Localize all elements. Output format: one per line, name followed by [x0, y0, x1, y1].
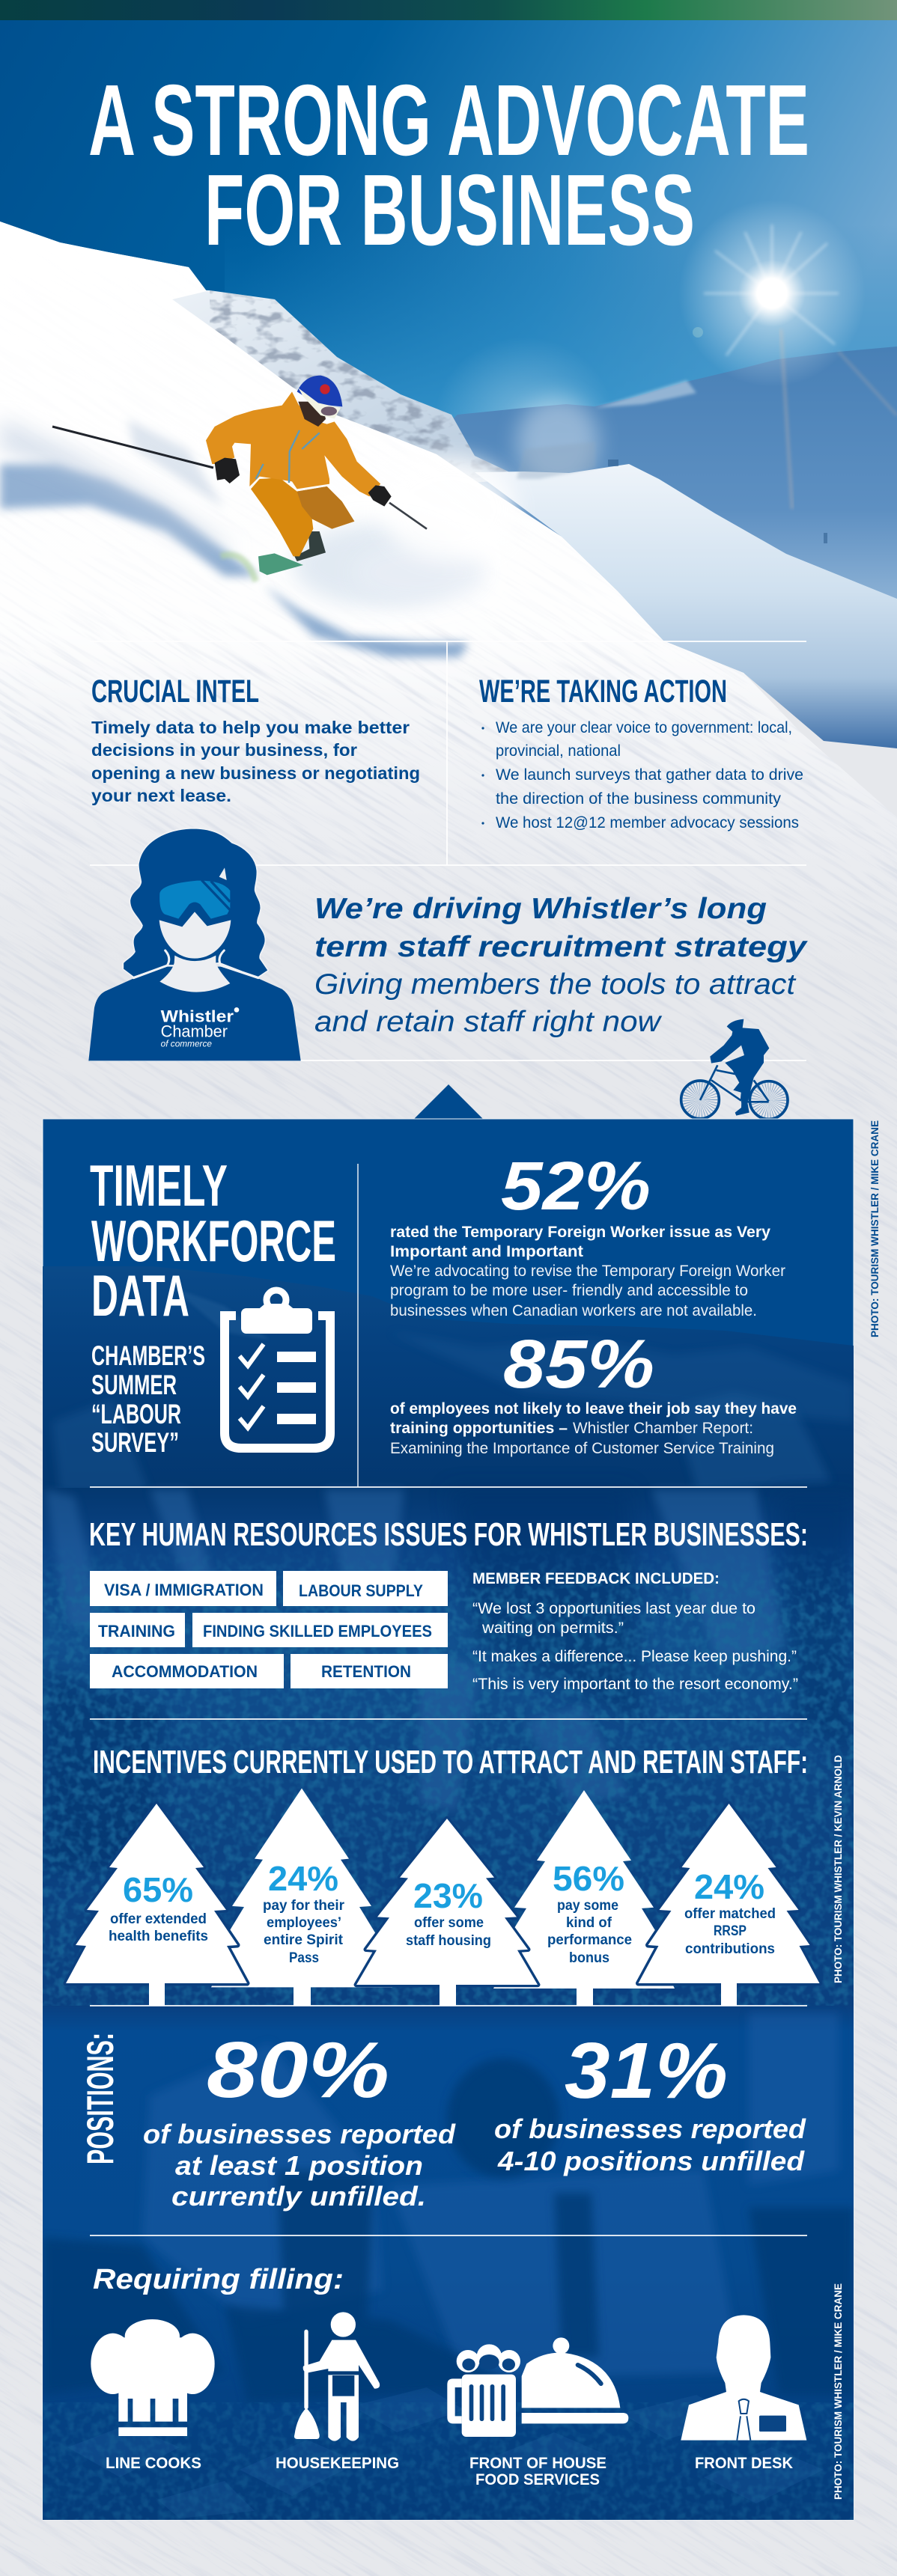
tag: accommodation: ACCOMMODATION [112, 1662, 258, 1681]
trousers [251, 477, 354, 556]
neck [159, 956, 230, 992]
section heading: timely workforce data: DATA [91, 1263, 189, 1328]
member feedback quotes: “We lost 3 opportunities last year due to [472, 1600, 755, 1617]
tree 4 shape [493, 1790, 675, 2006]
member feedback quotes: “It makes a difference... Please keep pushing.” [472, 1648, 797, 1665]
body copy: decisions in your business, for [91, 740, 357, 760]
stat: 85 percent: 85% [503, 1326, 654, 1403]
stat: 85 percent: of employees not likely to leave their job say they have [390, 1400, 797, 1417]
icon: front desk attendant [681, 2315, 806, 2441]
foam [457, 2350, 479, 2372]
tree 2 text: pay for their [263, 1898, 345, 1914]
tree 2 shape [211, 1789, 392, 2006]
tree 3 shape [356, 1819, 538, 2006]
tree 1 text [109, 1870, 208, 1944]
section heading: timely workforce data: TIMELY [90, 1153, 228, 1218]
goggle stripes [201, 880, 230, 910]
member feedback quotes: MEMBER FEEDBACK INCLUDED: [472, 1570, 720, 1587]
tag: retention: RETENTION [321, 1662, 411, 1681]
stat: 85 percent: Whistler Chamber Report: [573, 1420, 753, 1437]
ski pole right [389, 503, 427, 529]
tree 3 text [406, 1876, 491, 1949]
tree 4 text: 56% [553, 1859, 624, 1898]
bullet list: We host 12@12 member advocacy sessions [496, 814, 799, 831]
stat: 52 percent: We’re advocating to revise the Temporary Foreign Worker [390, 1263, 785, 1280]
rotated label: positions: POSITIONS: [79, 2033, 121, 2164]
chamber logo: Chamber [161, 1022, 228, 1040]
photo credit: mike crane top: PHOTO: TOURISM WHISTLER / MIKE CRANE [869, 1120, 881, 1337]
tree 4 text: pay some [557, 1898, 618, 1914]
bullet list [481, 719, 803, 831]
tree 5 text: contributions [685, 1941, 775, 1957]
heading: WE’RE TAKING ACTION [479, 674, 727, 709]
rider [710, 1019, 769, 1116]
member feedback quotes: waiting on permits.” [481, 1620, 624, 1637]
hero snow brightening [0, 222, 671, 663]
cloche [553, 2337, 569, 2354]
tree 1 text: offer extended [110, 1911, 207, 1927]
tree 3 text: 23% [413, 1876, 483, 1915]
staff recruitment statement: We’re driving Whistler’s long [314, 893, 767, 925]
role labels: FRONT DESK [695, 2455, 793, 2472]
panel base [43, 1119, 854, 2520]
subheading: chamber's summer labour survey: SURVEY” [91, 1427, 179, 1458]
heading: requiring filling: Requiring filling: [93, 2264, 344, 2295]
spokes [691, 1090, 709, 1108]
divider [90, 1718, 807, 1720]
tree 2 text: 24% [268, 1859, 338, 1898]
subheading: chamber's summer labour survey [91, 1340, 205, 1458]
icon: housekeeper with broom [294, 2312, 380, 2441]
stat: 85 percent: Examining the Importance of Customer Service Training [390, 1440, 774, 1457]
divider [90, 2005, 807, 2006]
tree 4 text: kind of [566, 1915, 612, 1931]
role labels: FRONT OF HOUSE [469, 2455, 606, 2472]
tag: retention [291, 1654, 448, 1688]
gloves [215, 458, 240, 483]
member feedback quotes: “This is very important to the resort economy.” [472, 1676, 798, 1693]
stat: 85 percent: training opportunities – [390, 1420, 568, 1437]
tag: visa [90, 1571, 276, 1606]
divider lines [90, 641, 806, 1060]
tree 1 text: 65% [123, 1870, 193, 1909]
tree 1 text: health benefits [109, 1929, 208, 1944]
ski [258, 553, 303, 575]
vertical divider in workforce panel [357, 1164, 359, 1487]
body copy [91, 718, 420, 805]
role labels: HOUSEKEEPING [276, 2455, 399, 2472]
tag: finding skilled employees: FINDING SKILLED EMPLOYEES [203, 1622, 432, 1640]
tree 5 text: 24% [694, 1867, 764, 1906]
stat: 31 percent unfilled: of businesses reported [494, 2113, 806, 2144]
chamber logo: of commerce [161, 1039, 212, 1049]
body copy: Timely data to help you make better [91, 718, 410, 737]
tag: finding skilled employees [192, 1613, 448, 1647]
tree 4 text: performance [547, 1932, 632, 1948]
photo credit: kevin arnold: PHOTO: TOURISM WHISTLER / KEVIN ARNOLD [833, 1755, 844, 1983]
tree 5 text: offer matched [684, 1906, 776, 1922]
stat: 52 percent: program to be more user- friendly and accessible to [390, 1282, 748, 1299]
tree 5 shape [638, 1804, 819, 2006]
body copy: opening a new business or negotiating [91, 763, 420, 783]
staff recruitment statement: term staff recruitment strategy [314, 931, 809, 963]
goggle lens [159, 881, 230, 919]
icon: beer mug and cloche [447, 2337, 628, 2437]
staff recruitment statement [314, 893, 809, 1038]
bullet list: We are your clear voice to government: local, [496, 719, 792, 736]
tree chart of incentives [66, 1789, 819, 2006]
snow texture streaks [0, 629, 897, 2576]
stat: 52 percent: Important and Important [390, 1243, 583, 1260]
hero title [88, 64, 809, 266]
tree 2 text: Pass [289, 1950, 319, 1966]
subheading: chamber's summer labour survey: “LABOUR [91, 1399, 181, 1429]
stat: 80 percent unfilled [143, 2026, 456, 2212]
tree 3 text: offer some [414, 1915, 484, 1931]
role labels: LINE COOKS [106, 2455, 201, 2472]
section heading: timely workforce data [90, 1153, 336, 1328]
photo credit: mike crane bottom: PHOTO: TOURISM WHISTLER / MIKE CRANE [833, 2283, 844, 2500]
tree 3 text: staff housing [406, 1933, 491, 1949]
tree 5 text: RRSP [714, 1923, 747, 1939]
chamber logo: Whistler [161, 1007, 234, 1025]
bullet list: We launch surveys that gather data to drive [496, 766, 803, 784]
face [159, 912, 231, 959]
subheading: chamber's summer labour survey: CHAMBER’S [91, 1340, 205, 1371]
neck and face [298, 402, 326, 427]
hair gap [219, 867, 227, 880]
jacket [206, 391, 380, 496]
tree 2 text: employees’ [267, 1915, 341, 1931]
tag: labour supply: LABOUR SUPPLY [299, 1581, 423, 1600]
tag: training: TRAINING [98, 1622, 175, 1640]
tag: accommodation [90, 1654, 284, 1688]
icon: clipboard with checklist [225, 1290, 330, 1448]
panel photo overlays [43, 1266, 854, 2520]
icon: cyclist [681, 1019, 788, 1119]
ski pole left [52, 427, 213, 468]
stat: 52 percent: businesses when Canadian workers are not available. [390, 1302, 757, 1319]
tag: labour supply [283, 1571, 448, 1606]
panel: we're taking action [479, 674, 803, 831]
sun with rays [678, 200, 897, 509]
divider [90, 2235, 807, 2236]
tree 5 text [684, 1867, 776, 1957]
staff recruitment statement: Giving members the tools to attract [314, 968, 797, 1001]
collar lines [133, 950, 258, 978]
stat: 85 percent [390, 1326, 797, 1457]
icon: skier woman with goggles and chamber logo [88, 828, 301, 1060]
jacket zip [256, 430, 320, 483]
tree 4 text: bonus [569, 1950, 609, 1966]
stat: 52 percent [390, 1148, 785, 1319]
wheels [681, 1081, 719, 1119]
staff recruitment statement: and retain staff right now [314, 1006, 663, 1038]
divider [90, 1486, 807, 1488]
section heading: timely workforce data: WORKFORCE [91, 1208, 336, 1274]
hero slope shadows and powder spray [0, 419, 517, 657]
stat: 31 percent unfilled [494, 2027, 806, 2176]
mug body [462, 2375, 516, 2437]
tree 2 text [263, 1859, 345, 1966]
torso [88, 967, 301, 1060]
subheading: chamber's summer labour survey: SUMMER [91, 1370, 177, 1400]
boots [294, 531, 326, 561]
bullet list: provincial, national [496, 742, 621, 760]
tree 2 text: entire Spirit [264, 1932, 344, 1948]
tag: visa: VISA / IMMIGRATION [104, 1581, 264, 1599]
skier illustration [52, 376, 427, 582]
panel: workforce data [43, 1084, 854, 2520]
hair [123, 828, 268, 977]
tag: training [90, 1613, 185, 1647]
body copy: your next lease. [91, 786, 231, 805]
stat: 31 percent unfilled: 4-10 positions unfilled [497, 2146, 805, 2176]
panel: crucial intel [91, 674, 420, 805]
icon: chef hat [91, 2319, 215, 2436]
goggles [298, 388, 341, 418]
stat: 80 percent unfilled: of businesses reported [143, 2119, 456, 2149]
panel notch triangle [413, 1084, 484, 1120]
chamber logo [161, 1007, 239, 1049]
stat: 80 percent unfilled: 80% [207, 2026, 389, 2114]
stat: 80 percent unfilled: at least 1 position [175, 2150, 423, 2181]
helmet [297, 376, 342, 406]
top colour strip [0, 0, 897, 20]
stat: 80 percent unfilled: currently unfilled. [171, 2181, 426, 2212]
role labels: FOOD SERVICES [475, 2471, 600, 2488]
tree 4 text [547, 1859, 632, 1966]
tree 1 shape [66, 1804, 247, 2006]
hero photo: sky, mountains and snow slope [0, 20, 897, 796]
role labels [106, 2455, 793, 2488]
stat: 52 percent: 52% [501, 1148, 651, 1224]
member feedback quotes [472, 1570, 798, 1693]
bullet list: the direction of the business community [496, 790, 782, 808]
frame [700, 1065, 769, 1102]
stat: 52 percent: rated the Temporary Foreign Worker issue as Very [390, 1224, 770, 1241]
heading: CRUCIAL INTEL [91, 674, 259, 709]
stat: 31 percent unfilled: 31% [565, 2027, 728, 2115]
rainbow lens flare [221, 555, 256, 582]
issue tags [90, 1571, 448, 1688]
